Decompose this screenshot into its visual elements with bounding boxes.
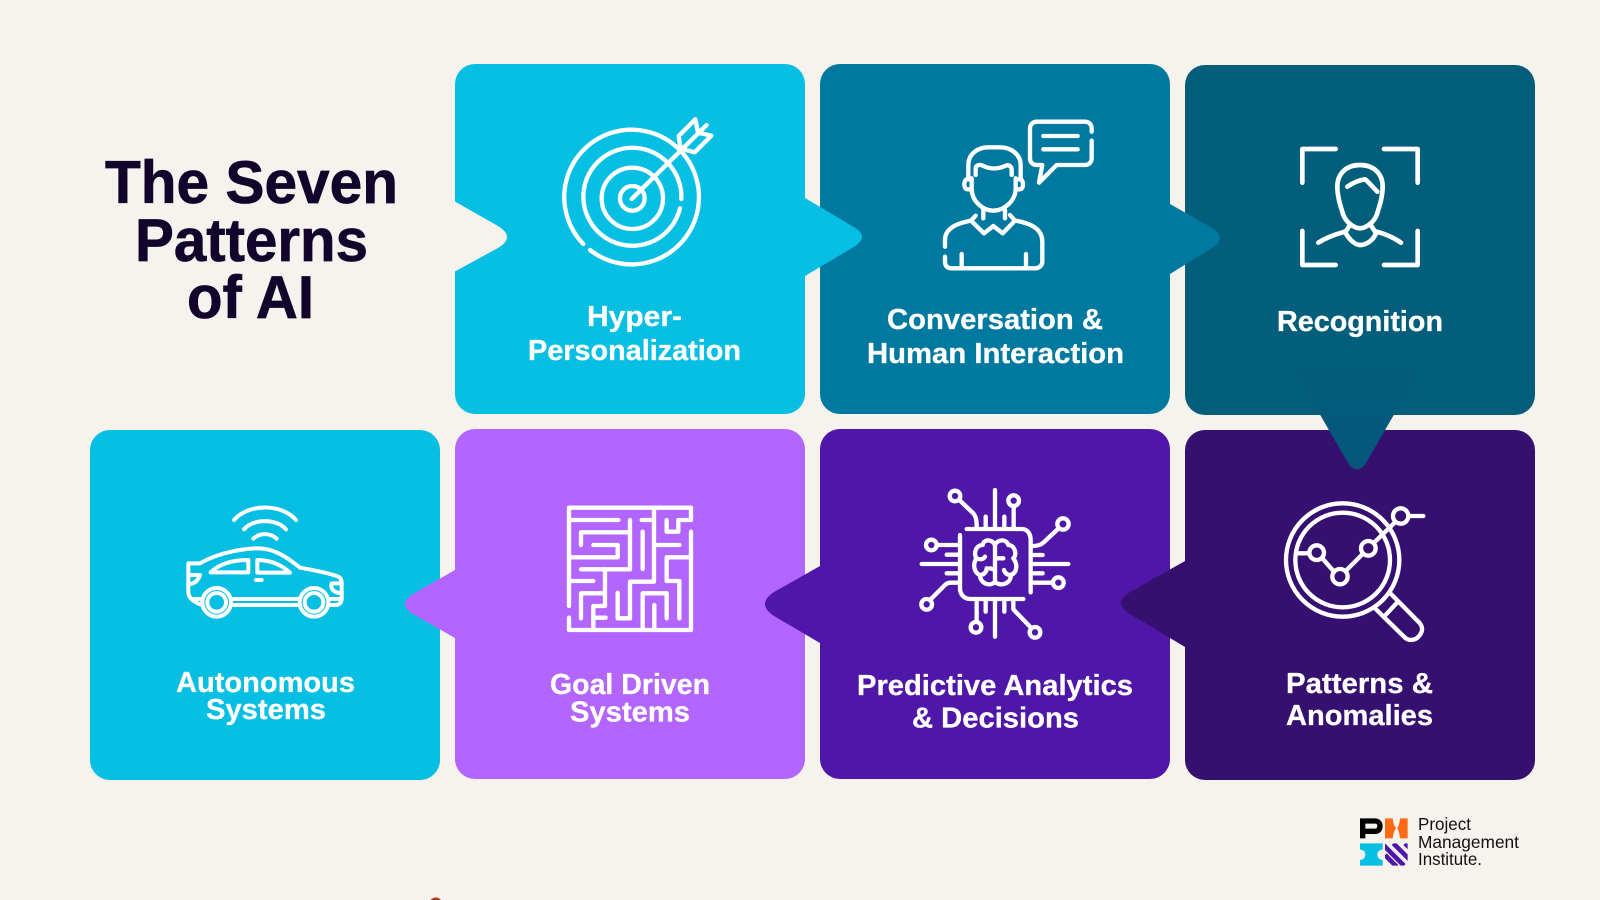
- icon: maze: [569, 508, 691, 630]
- panel: Patterns and Anomalies: [1121, 430, 1535, 780]
- logo: Project Management Institute: [1360, 817, 1519, 866]
- icon: person with speech bubble: [945, 122, 1092, 268]
- logo wordmark: Project: [1418, 814, 1471, 834]
- label: Patterns and Anomalies: Patterns &: [1286, 668, 1433, 700]
- icon: face recognition frame: [1302, 149, 1418, 265]
- label: Hyper-Personalization: Hyper-: [587, 301, 682, 333]
- title: [105, 149, 398, 331]
- panel: Autonomous Systems: [90, 430, 440, 780]
- icon: connected car: [188, 507, 342, 617]
- arrow: predictive to goal: [765, 566, 820, 643]
- label: Autonomous Systems: [176, 667, 355, 726]
- icon: AI chip with brain: [921, 490, 1069, 638]
- label: Goal Driven Systems: Goal Driven: [550, 669, 710, 701]
- label: Goal Driven Systems: [550, 669, 710, 728]
- arrow: hyper-personalization to conversation: [805, 198, 862, 276]
- panel: Recognition: [1185, 65, 1535, 470]
- arrow: goal to autonomous: [405, 570, 455, 638]
- label: Predictive Analytics and Decisions: & Decisions: [912, 702, 1079, 734]
- cropped red dot at bottom edge: [429, 898, 442, 900]
- icon: target with arrow: [564, 119, 711, 264]
- label: Conversation and Human Interaction: [867, 304, 1124, 370]
- label: Recognition: Recognition: [1277, 306, 1443, 338]
- label: Patterns and Anomalies: [1286, 668, 1433, 732]
- label: Conversation and Human Interaction: Conversation &: [887, 304, 1103, 336]
- label: Conversation and Human Interaction: Human Interaction: [867, 338, 1124, 370]
- title: of AI: [187, 264, 314, 331]
- arrow: recognition to patterns: [1299, 367, 1415, 470]
- logo wordmark: [1418, 814, 1519, 869]
- logo mark: [1360, 818, 1408, 866]
- label: Autonomous Systems: Autonomous: [176, 667, 355, 699]
- title: The Seven: [105, 149, 398, 216]
- panel: Conversation and Human Interaction: [820, 64, 1220, 414]
- panel: Goal Driven Systems: [405, 429, 805, 779]
- panel: Predictive Analytics and Decisions: [765, 429, 1170, 779]
- logo wordmark: Institute.: [1418, 849, 1482, 869]
- label: Autonomous Systems: Systems: [206, 694, 326, 726]
- logo wordmark: Management: [1418, 832, 1519, 852]
- panel: Hyper-Personalization: [454, 64, 862, 414]
- arrow: notch entering hyper-personalization: [454, 201, 507, 272]
- label: Predictive Analytics and Decisions: [857, 670, 1133, 734]
- icon: magnifier with line chart: [1286, 503, 1423, 640]
- title: Patterns: [135, 207, 368, 274]
- label: Patterns and Anomalies: Anomalies: [1286, 700, 1433, 732]
- label: Goal Driven Systems: Systems: [570, 696, 690, 728]
- label: Hyper-Personalization: Personalization: [528, 335, 741, 367]
- label: Predictive Analytics and Decisions: Predictive Analytics: [857, 670, 1133, 702]
- arrow: patterns to predictive: [1121, 561, 1185, 647]
- arrow: conversation to recognition: [1170, 204, 1220, 274]
- label: Hyper-Personalization: [528, 301, 741, 367]
